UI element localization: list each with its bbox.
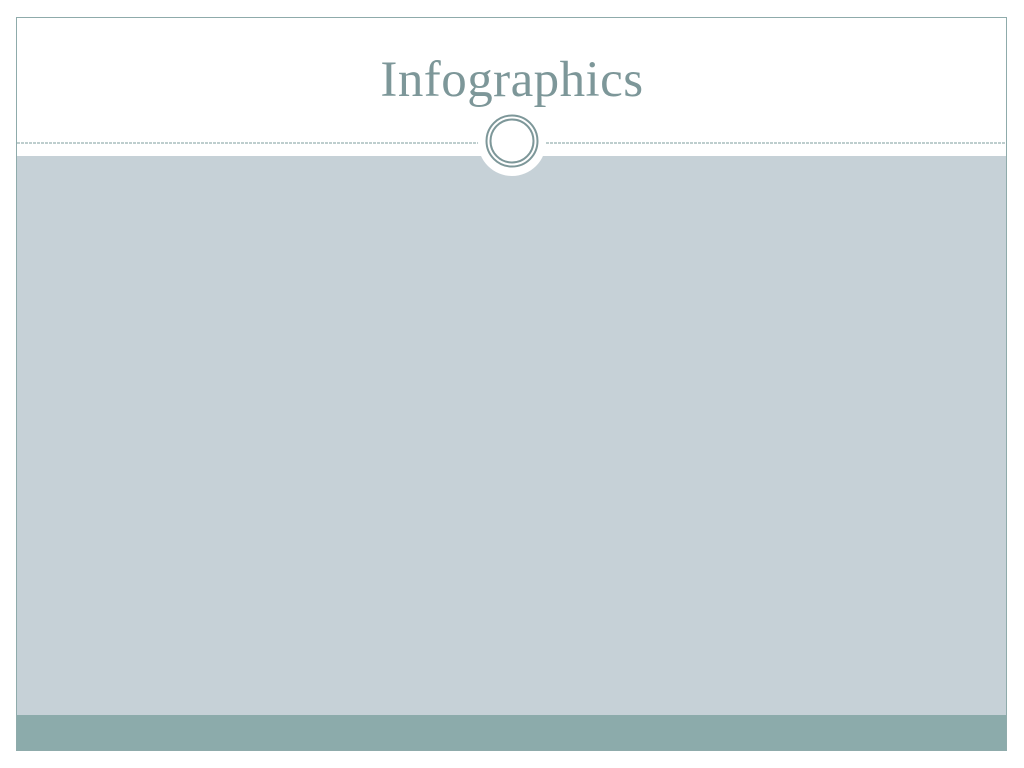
footer band	[17, 715, 1006, 750]
title: Infographics	[380, 52, 644, 108]
content panel	[17, 156, 1006, 715]
